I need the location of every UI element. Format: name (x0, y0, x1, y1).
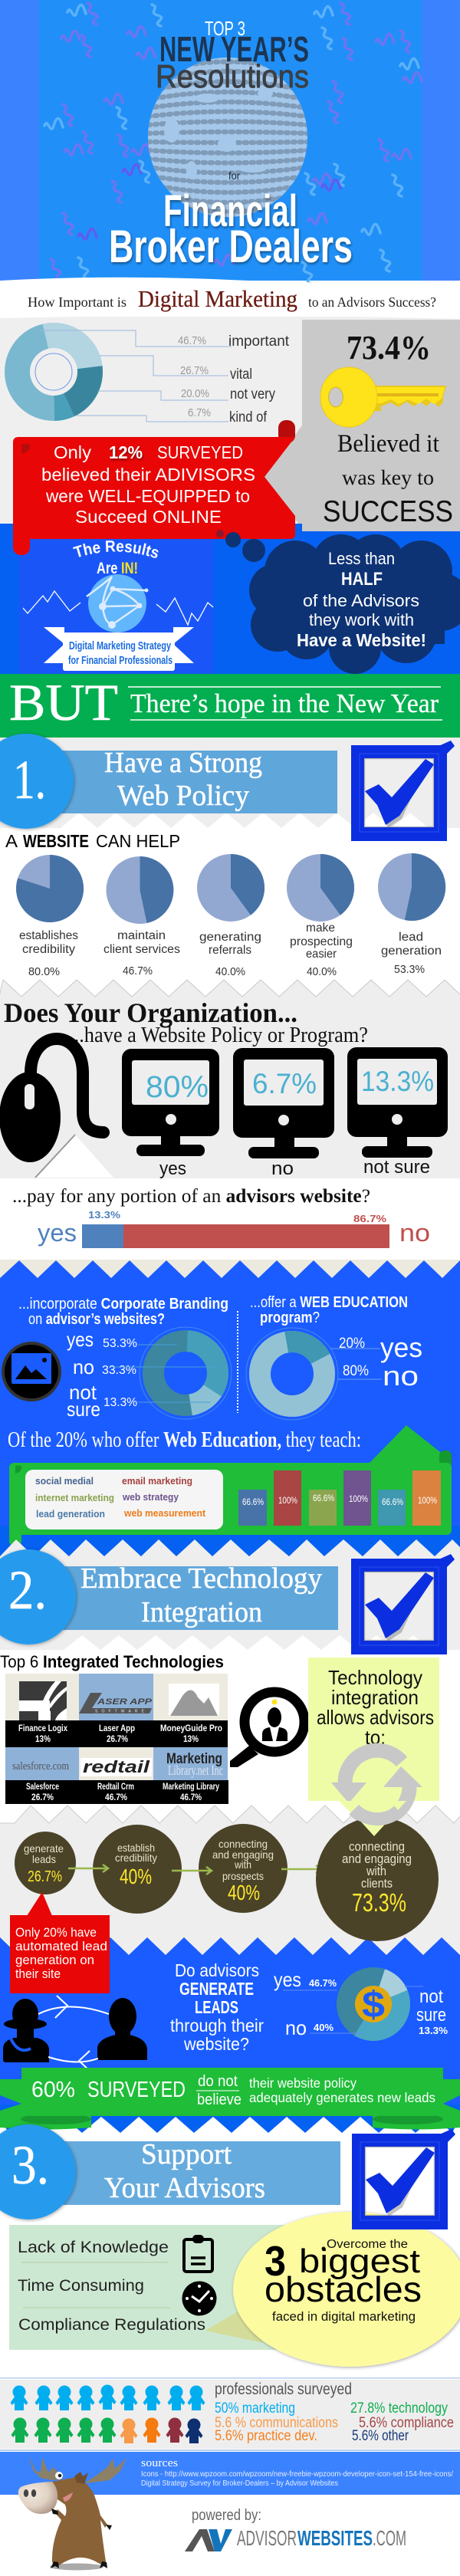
ribbon text (249, 2075, 435, 2105)
technology labels: Redtail Crm (97, 1783, 134, 1792)
stacked bar (82, 1224, 389, 1248)
pie labels: credibility (22, 943, 75, 956)
title: Top 3: TOP 3 (205, 17, 245, 40)
survey breakdown: 5.6% practice dev. (215, 2428, 317, 2444)
value 80%: 80% (146, 1070, 209, 1104)
web education labels (339, 1332, 422, 1392)
pie leaders and labels: yes (274, 1968, 301, 1991)
heading line 1: Have a Strong (104, 747, 262, 779)
callout: automated lead generation: generation on (15, 1953, 94, 1967)
bubble: overcome: Overcome the (327, 2238, 408, 2251)
banner text line 4: Succeed ONLINE (75, 507, 222, 527)
banner text line 1: SURVEYED (157, 442, 243, 462)
logo: marketing library (166, 1751, 223, 1778)
question text left: How Important is (28, 294, 127, 310)
legend box: web strategy (122, 1491, 179, 1503)
pie labels: make (306, 922, 335, 935)
icon: image badge (3, 1343, 60, 1400)
corporate branding labels: not (69, 1381, 97, 1404)
ribbon stat: 60% (31, 2078, 75, 2102)
legend box: lead generation (36, 1508, 105, 1520)
circle: generate leads (15, 1832, 76, 1894)
bubble: 3 biggest: 3 (264, 2237, 286, 2285)
icon: clock (182, 2282, 216, 2315)
section 3 heading (0, 2124, 340, 2220)
pie labels: generating (199, 931, 261, 944)
value no: 86.7% (353, 1213, 386, 1224)
circle: generate leads: leads (32, 1853, 56, 1865)
panel: pay for website (0, 1178, 460, 1260)
technology labels: Marketing Library (163, 1783, 219, 1792)
label yes: yes (38, 1219, 77, 1247)
pie labels: establishes (19, 929, 78, 942)
cloud text (297, 549, 426, 650)
question: generate leads: Do advisors (175, 1960, 259, 1980)
callout: automated lead generation: automated lead (15, 1939, 107, 1953)
refresh icon overlap (354, 1809, 399, 1819)
ribbon (44, 627, 194, 671)
technology labels: Salesforce (26, 1783, 59, 1792)
logo: advisor websites: ADVISOR (237, 2526, 297, 2550)
title: Resolutions: Resolutions (156, 58, 309, 94)
heading: top 6 technologies: Top 6 Integrated Technologies (0, 1652, 224, 1671)
callout: automated lead generation: their site (15, 1967, 61, 1981)
icon: woman and man exchange (3, 1996, 147, 2071)
heading: corporate branding (18, 1296, 228, 1328)
pie leaders and labels: not (419, 1986, 443, 2007)
ribbon text 2: for Financial Professionals (68, 654, 172, 667)
cloud callout (216, 530, 460, 674)
technology labels: 26.7% (31, 1793, 54, 1802)
pie labels: referrals (209, 944, 251, 957)
donut leader lines (39, 330, 232, 422)
logo: redtail: redtail (83, 1757, 150, 1776)
circle: establish credibility: establish (117, 1842, 155, 1854)
donut: corporate branding (112, 1327, 232, 1419)
technology labels: Finance Logix (18, 1724, 67, 1733)
banner text line 2: believed their ADIVISORS (41, 465, 255, 485)
donut labels: 20.0% (181, 387, 209, 400)
pie labels: client services (104, 943, 180, 956)
donut labels: not very (230, 386, 275, 402)
stat 73.4%: 73.4% (347, 329, 431, 366)
circle: generate leads: 26.7% (28, 1868, 62, 1885)
corporate branding labels: yes (67, 1328, 94, 1351)
obstacle 3: Compliance Regulations (18, 2316, 205, 2334)
icon: clipboard (184, 2235, 212, 2272)
note: technology integration: Technology (328, 1666, 422, 1689)
ribbon text 1: Digital Marketing Strategy (69, 639, 171, 652)
note: technology integration: integration (331, 1686, 419, 1709)
circle: establish credibility: credibility (115, 1852, 157, 1864)
heading line 2: Web Policy (117, 780, 249, 812)
panel: results are in (19, 539, 213, 674)
subheading: website policy: ...have a Website Policy or Program? (69, 1024, 368, 1047)
panel: professionals surveyed (0, 2377, 460, 2451)
circle: engaging clients: clients (361, 1877, 393, 1891)
corporate branding labels (67, 1328, 137, 1421)
technology labels: MoneyGuide Pro (160, 1724, 222, 1733)
section 2 background (0, 1539, 460, 1807)
web education labels: 20% (339, 1336, 365, 1352)
icon: key (320, 367, 446, 427)
heading: a website can help: WEBSITE (23, 831, 89, 851)
pie labels: maintain (117, 929, 166, 942)
sparkline left (23, 591, 80, 613)
pie leaders and labels: 13.3% (419, 2025, 448, 2036)
heading: hope: There’s hope in the New Year (130, 688, 439, 718)
note: technology integration: allows advisors (317, 1706, 434, 1729)
corporate branding labels: no (73, 1355, 94, 1378)
pie labels: 46.7% (123, 964, 153, 978)
value 6.7%: 6.7% (252, 1068, 317, 1099)
bar chart: 66.6% (382, 1497, 403, 1507)
monitor: no 6.7% (233, 1048, 334, 1179)
question text right: to an Advisors Success? (308, 294, 436, 310)
logo: marketing library: Library.net Inc (168, 1763, 223, 1778)
dollar sign: $ (362, 1985, 385, 2026)
pie leaders and labels: 46.7% (309, 1977, 337, 1989)
circle: engaging clients: 73.3% (352, 1888, 406, 1917)
logo: advisor websites: .COM (373, 2526, 406, 2550)
circle: engaging prospects: prospects (222, 1870, 264, 1882)
section 2 heading (0, 1549, 338, 1644)
corporate branding labels: 33.3% (102, 1364, 136, 1377)
cloud text: they work with (309, 610, 414, 629)
pie labels: generation (381, 945, 442, 958)
label not sure: not sure (363, 1157, 430, 1178)
section 1 background (0, 738, 460, 981)
ribbon text: their website policy (249, 2075, 356, 2091)
heading: web education teach: Of the 20% who offer Web Education, they teach: (8, 1428, 361, 1452)
logo: laser app (79, 1693, 153, 1714)
icon: refresh (331, 1750, 422, 1819)
callout: automated lead generation: Only 20% have (15, 1925, 97, 1940)
red banner (13, 420, 295, 555)
donut labels: 6.7% (188, 406, 211, 419)
heading rules (128, 687, 442, 720)
people row 1 (11, 2384, 205, 2410)
circle: generate leads: generate (24, 1842, 64, 1855)
circle: engaging prospects: with (234, 1858, 251, 1871)
text: believed it: Believed it (337, 430, 439, 458)
heading: web education: program? (260, 1309, 320, 1326)
circle: engaging prospects: and engaging (212, 1848, 274, 1861)
logo: laser app: SOFTWARE (95, 1710, 145, 1714)
numeral 1: 1. (13, 749, 46, 810)
panel: obstacles list (9, 2225, 293, 2350)
panel: teaching topics (9, 1425, 452, 1546)
question: generate leads: LEADS (195, 1997, 238, 2017)
survey breakdown (215, 2400, 454, 2444)
circle: establish credibility (93, 1825, 182, 1914)
legend box: email marketing (122, 1475, 192, 1487)
logo: advisor websites: WEBSITES (297, 2526, 373, 2550)
pie leaders and labels: no (285, 2016, 307, 2039)
ribbon do not believe (196, 2073, 242, 2108)
speech bubble: biggest obstacles (205, 2212, 460, 2367)
heading line 1: Support (141, 2138, 232, 2170)
technology grid (5, 1674, 228, 1804)
ribbon do not believe: believe (197, 2091, 242, 2108)
donut labels (178, 334, 290, 426)
question: generate leads: website? (183, 2034, 249, 2054)
legend box: web measurement (123, 1507, 206, 1519)
ribbon do not believe: do not (198, 2073, 238, 2090)
ribbon text: adequately generates new leads (249, 2090, 435, 2105)
corporate branding labels: sure (67, 1398, 100, 1421)
note: technology integration: to: (365, 1726, 386, 1749)
question band (0, 278, 460, 531)
heading line 2: Integration (141, 1596, 262, 1628)
cloud text: HALF (341, 569, 383, 590)
panel: sources (0, 2452, 460, 2495)
section 3 background (0, 2104, 460, 2576)
question: generate leads (170, 1960, 264, 2054)
technology labels: 46.7% (105, 1793, 127, 1802)
text: was key to: was key to (342, 466, 434, 489)
green band: but (0, 673, 460, 738)
monitor: yes 80% (122, 1049, 219, 1179)
question: generate leads: GENERATE (179, 1979, 254, 1999)
pie labels: 40.0% (307, 965, 337, 978)
header background (0, 0, 460, 281)
callout: automated lead generation (10, 1892, 110, 1993)
bar chart: 100% (349, 1493, 368, 1504)
donut: web education (246, 1328, 382, 1420)
logo: salesforce: salesforce.com (12, 1760, 69, 1773)
heading line 2: Your Advisors (104, 2172, 265, 2204)
bar chart: 66.6% (313, 1493, 334, 1503)
heading: a website can help (5, 831, 180, 851)
pie leaders and labels (274, 1968, 448, 2039)
confetti (44, 3, 422, 284)
bubble: faced in digital marketing: faced in digital marketing (272, 2309, 416, 2324)
survey heading: professionals surveyed (215, 2380, 352, 2398)
obstacle 1: Lack of Knowledge (18, 2239, 169, 2256)
question text: ...pay for any portion of an advisors website? (12, 1186, 370, 1207)
logo: laser app: ASER APP (97, 1697, 153, 1707)
cloud text: Have a Website! (297, 630, 426, 650)
banner text line 3: were WELL-EQUIPPED to (45, 486, 250, 506)
value 13.3%: 13.3% (361, 1066, 434, 1097)
source 2: Digital Strategy Survey for Broker-Dealers – by Advisor Websites (141, 2479, 338, 2488)
heading: does your organization: Does Your Organization... (4, 997, 297, 1028)
heading: corporate branding: ...incorporate Corporate Branding (18, 1296, 228, 1313)
circle: engaging prospects: 40% (228, 1881, 260, 1904)
bubble: 3 biggest: biggest (299, 2242, 420, 2280)
technology labels: 46.7% (180, 1793, 202, 1802)
donut labels: vital (230, 366, 252, 383)
woman (3, 1999, 49, 2062)
question: generate leads: through their (170, 2016, 264, 2036)
blue lead generation section (0, 1937, 460, 2104)
man (97, 1998, 147, 2060)
icon: checkbox 3 (352, 2129, 455, 2229)
web education labels: 80% (343, 1363, 369, 1379)
donut labels: 46.7% (178, 334, 206, 347)
circle: establish credibility: 40% (120, 1865, 152, 1888)
people row 2 (11, 2418, 202, 2443)
pie: generate leads (350, 1980, 397, 2028)
question text highlight: Digital Marketing (138, 285, 297, 312)
circle: engaging prospects (199, 1824, 288, 1913)
icon: mouse (0, 1039, 113, 1178)
survey breakdown: 5.6 % communications (215, 2415, 338, 2431)
cloud text: Less than (328, 549, 395, 568)
bar chart: 100% (418, 1495, 437, 1506)
heading: a website can help: CAN HELP (96, 831, 180, 851)
donut labels: important (228, 334, 290, 350)
circle: engaging clients: with (366, 1865, 386, 1878)
technology labels: Laser App (99, 1724, 135, 1733)
logo: moneyguide pro (169, 1684, 219, 1716)
heading: a website can help: A (5, 831, 18, 851)
donut chart: importance (5, 323, 103, 421)
bar chart: 66.6% (242, 1497, 264, 1507)
bar chart: 100% (278, 1495, 297, 1506)
technology labels: 26.7% (107, 1735, 128, 1744)
circle: engaging prospects: connecting (219, 1838, 268, 1850)
label no: no (271, 1158, 294, 1179)
icon: globe (87, 574, 149, 632)
illustration: moose (18, 2456, 127, 2570)
pie leaders and labels: 40% (314, 2022, 334, 2033)
note: technology integration (308, 1658, 439, 1836)
panel: key to success (264, 320, 460, 531)
legend box: social medial (35, 1475, 94, 1487)
title: for: for (228, 169, 240, 182)
heading: web education (250, 1294, 408, 1326)
icon: checkbox 2 (351, 1554, 455, 1654)
exchange arrows (38, 1996, 109, 2071)
heading line 1: Embrace Technology (80, 1562, 322, 1595)
value yes: 13.3% (88, 1209, 120, 1221)
arrows between circles (68, 1865, 321, 1875)
circle: engaging clients (316, 1801, 439, 1941)
web education labels: no (383, 1360, 419, 1392)
banner text line 1: 12% (109, 442, 143, 462)
numeral 2: 2. (8, 1559, 47, 1621)
icon: magnifier with person (230, 1692, 304, 1767)
circle: engaging clients: and engaging (342, 1852, 412, 1866)
pie labels (19, 922, 442, 978)
heading: are in: Are IN! (97, 560, 138, 577)
sparkline right (156, 598, 213, 625)
heading: corporate branding: on advisor’s websites? (28, 1311, 165, 1328)
numeral 3: 3. (12, 2134, 49, 2196)
title: Financial: Financial (163, 186, 297, 236)
gray lower section background (0, 1806, 460, 1963)
blue band (0, 524, 460, 674)
title: New Year's: NEW YEAR’S (159, 29, 309, 69)
technology labels: 13% (183, 1735, 199, 1744)
web education labels: yes (380, 1332, 422, 1363)
pie labels: 80.0% (28, 965, 60, 978)
label yes: yes (159, 1158, 186, 1179)
banner text line 1 (54, 442, 243, 462)
logo: finance logix (19, 1681, 67, 1720)
monitor: not sure 13.3% (347, 1047, 448, 1178)
technology labels (18, 1724, 222, 1802)
heading: but: BUT (9, 673, 118, 731)
pie labels: lead (399, 931, 423, 944)
survey breakdown: 50% marketing (215, 2400, 295, 2417)
legend box: internet marketing (35, 1492, 114, 1503)
sources heading: sources (141, 2457, 178, 2469)
disco ball (148, 52, 307, 217)
pie charts (16, 853, 445, 924)
circle: engaging clients: connecting (349, 1840, 405, 1854)
arched heading: The Results (73, 540, 158, 558)
bubble: 3 biggest (264, 2237, 420, 2285)
blue section background (0, 1260, 460, 1558)
obstacle 2: Time Consuming (18, 2277, 144, 2295)
pie labels: prospecting (290, 935, 353, 948)
logo: advisor websites (185, 2526, 406, 2551)
survey breakdown: 5.6% other (352, 2428, 409, 2444)
donut labels: 26.7% (180, 364, 209, 377)
green ribbon (0, 2068, 460, 2130)
logo: marketing library: Marketing (166, 1751, 222, 1767)
gray panel: does your organization (0, 980, 460, 1179)
powered by: powered by: (192, 2507, 261, 2524)
bubble: obstacles: obstacles (264, 2269, 422, 2309)
pie labels: easier (306, 948, 337, 961)
cloud text: of the Advisors (303, 591, 419, 610)
icon: checkbox 1 (351, 741, 455, 841)
section 1 heading (0, 734, 337, 829)
pie leaders and labels: sure (416, 2005, 446, 2026)
corporate branding labels: 53.3% (103, 1337, 137, 1350)
label no: no (399, 1219, 430, 1247)
title: Broker Dealers: Broker Dealers (109, 221, 353, 272)
corporate branding labels: 13.3% (104, 1396, 137, 1409)
pie labels: 40.0% (215, 965, 245, 978)
donut labels: kind of (229, 409, 268, 426)
banner text line 1: Only (54, 442, 92, 462)
legend box (25, 1470, 223, 1530)
heading: web education: ...offer a WEB EDUCATION (250, 1294, 408, 1311)
technology labels: 13% (35, 1735, 51, 1744)
pie labels: 53.3% (394, 963, 425, 976)
ribbon surveyed: SURVEYED (87, 2078, 186, 2102)
bar chart (238, 1470, 441, 1526)
divider (237, 1311, 238, 1413)
